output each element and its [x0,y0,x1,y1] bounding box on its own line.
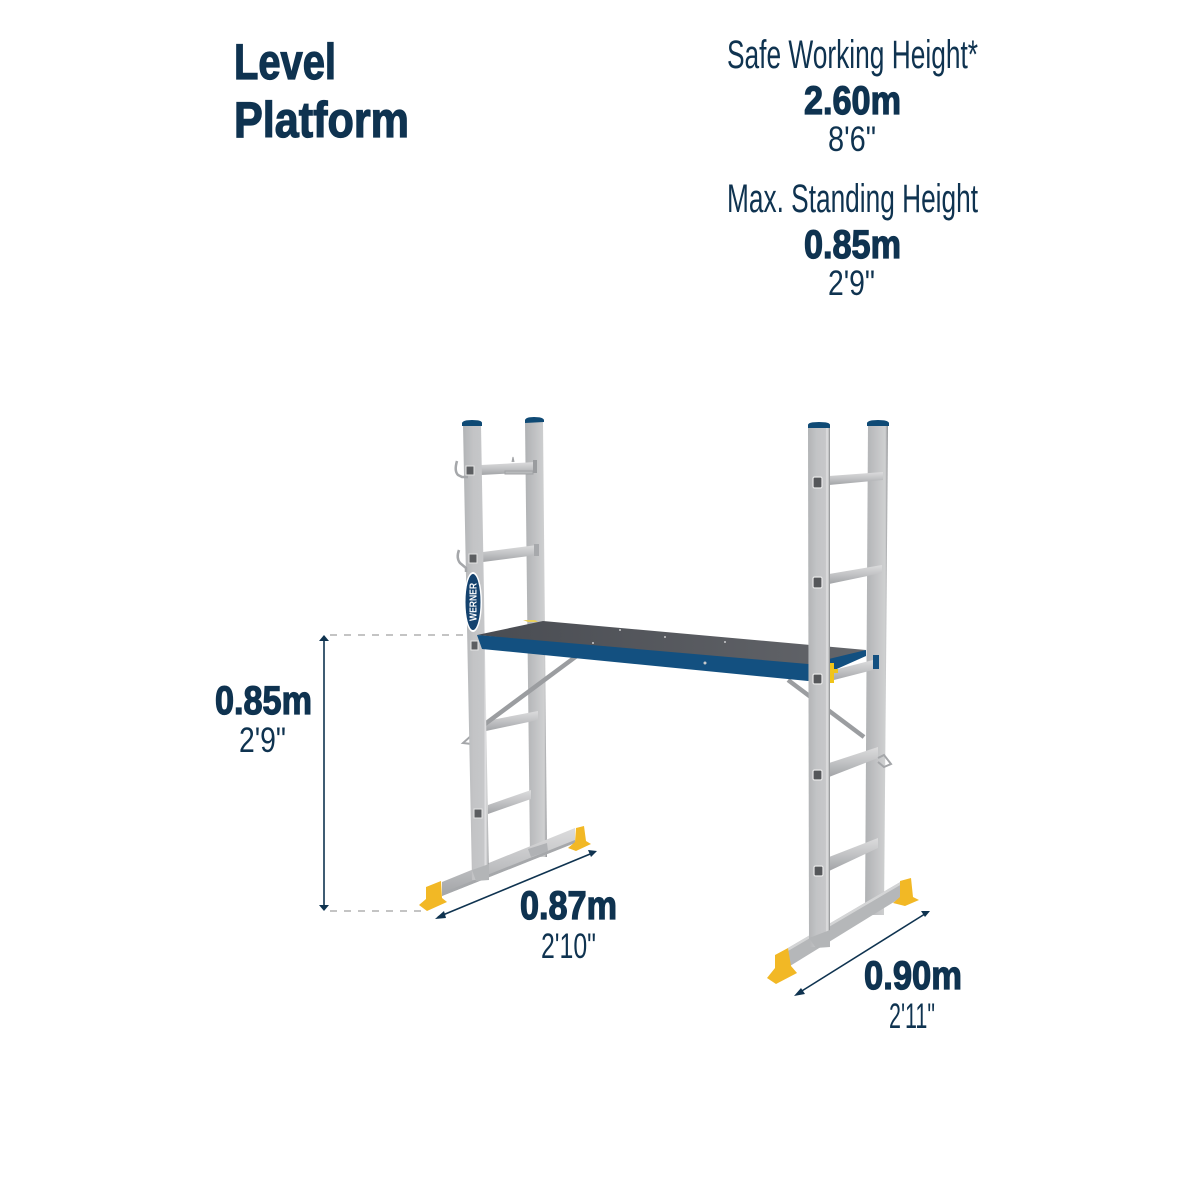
title [234,34,409,148]
dimension label: left base width [520,884,617,966]
right rung 2 [829,565,882,584]
dimension label: right base width: 2'11" [889,997,935,1036]
left brace hook [463,727,481,745]
right foot bar [788,881,902,966]
left platform clip [523,620,538,622]
dimension: right base width arrow [794,911,930,996]
left yellow foot, left [419,881,447,911]
text block: safe working height [727,33,978,159]
right brace pin [878,755,891,767]
dimension label: left base width: 2'10" [541,927,596,966]
right yellow foot, rear [893,878,919,906]
left rung 3 [486,711,538,731]
text block: safe working height: 2.60m [804,79,901,123]
title: Platform [234,92,409,148]
text block: safe working height: 8'6" [828,120,876,159]
right brace [788,680,864,737]
Werner logo: WERNER [468,582,480,621]
left foot bar [442,828,575,896]
right rear stile [865,420,889,915]
title: Level [234,34,336,90]
dimension: left base width arrow [435,850,597,919]
text block: max standing height: 0.85m [804,223,901,267]
text block: max standing height: 2'9" [828,264,875,303]
right rung 1 [829,472,883,485]
left rung 1 [481,457,537,475]
dimension label: right base width: 0.90m [864,954,962,998]
left rung 4 [488,790,531,814]
platform deck [477,621,866,668]
left stile holes [466,466,482,818]
left front stile [462,420,489,881]
text block: max standing height [727,177,978,303]
dimension: vertical height arrow [319,635,465,911]
dimension label: right base width [864,954,962,1036]
Werner logo [464,572,482,632]
deck fixings [592,629,726,664]
platform end bracket [830,655,879,683]
dimension label: left base width: 0.87m [520,884,617,928]
right rung 4 [829,747,878,777]
right front stile [808,422,830,948]
left yellow foot, right [568,826,591,851]
platform blue edge [477,635,866,681]
left hooks [456,461,468,572]
dimension label: height: 0.85m [215,679,312,723]
text block: safe working height: Safe Working Height* [727,33,978,77]
right yellow foot, front [767,948,797,984]
left rear stile [525,417,547,857]
left rung 2 [483,544,539,562]
text block: max standing height: Max. Standing Height [727,177,978,221]
dimension label: height [215,679,312,760]
illustration: left ladder frame [419,417,591,911]
illustration: right ladder frame rear parts [788,420,919,966]
illustration: platform [477,620,879,683]
dimension label: height: 2'9" [239,721,286,760]
left brace [481,655,578,727]
right rung 5 [829,838,878,871]
